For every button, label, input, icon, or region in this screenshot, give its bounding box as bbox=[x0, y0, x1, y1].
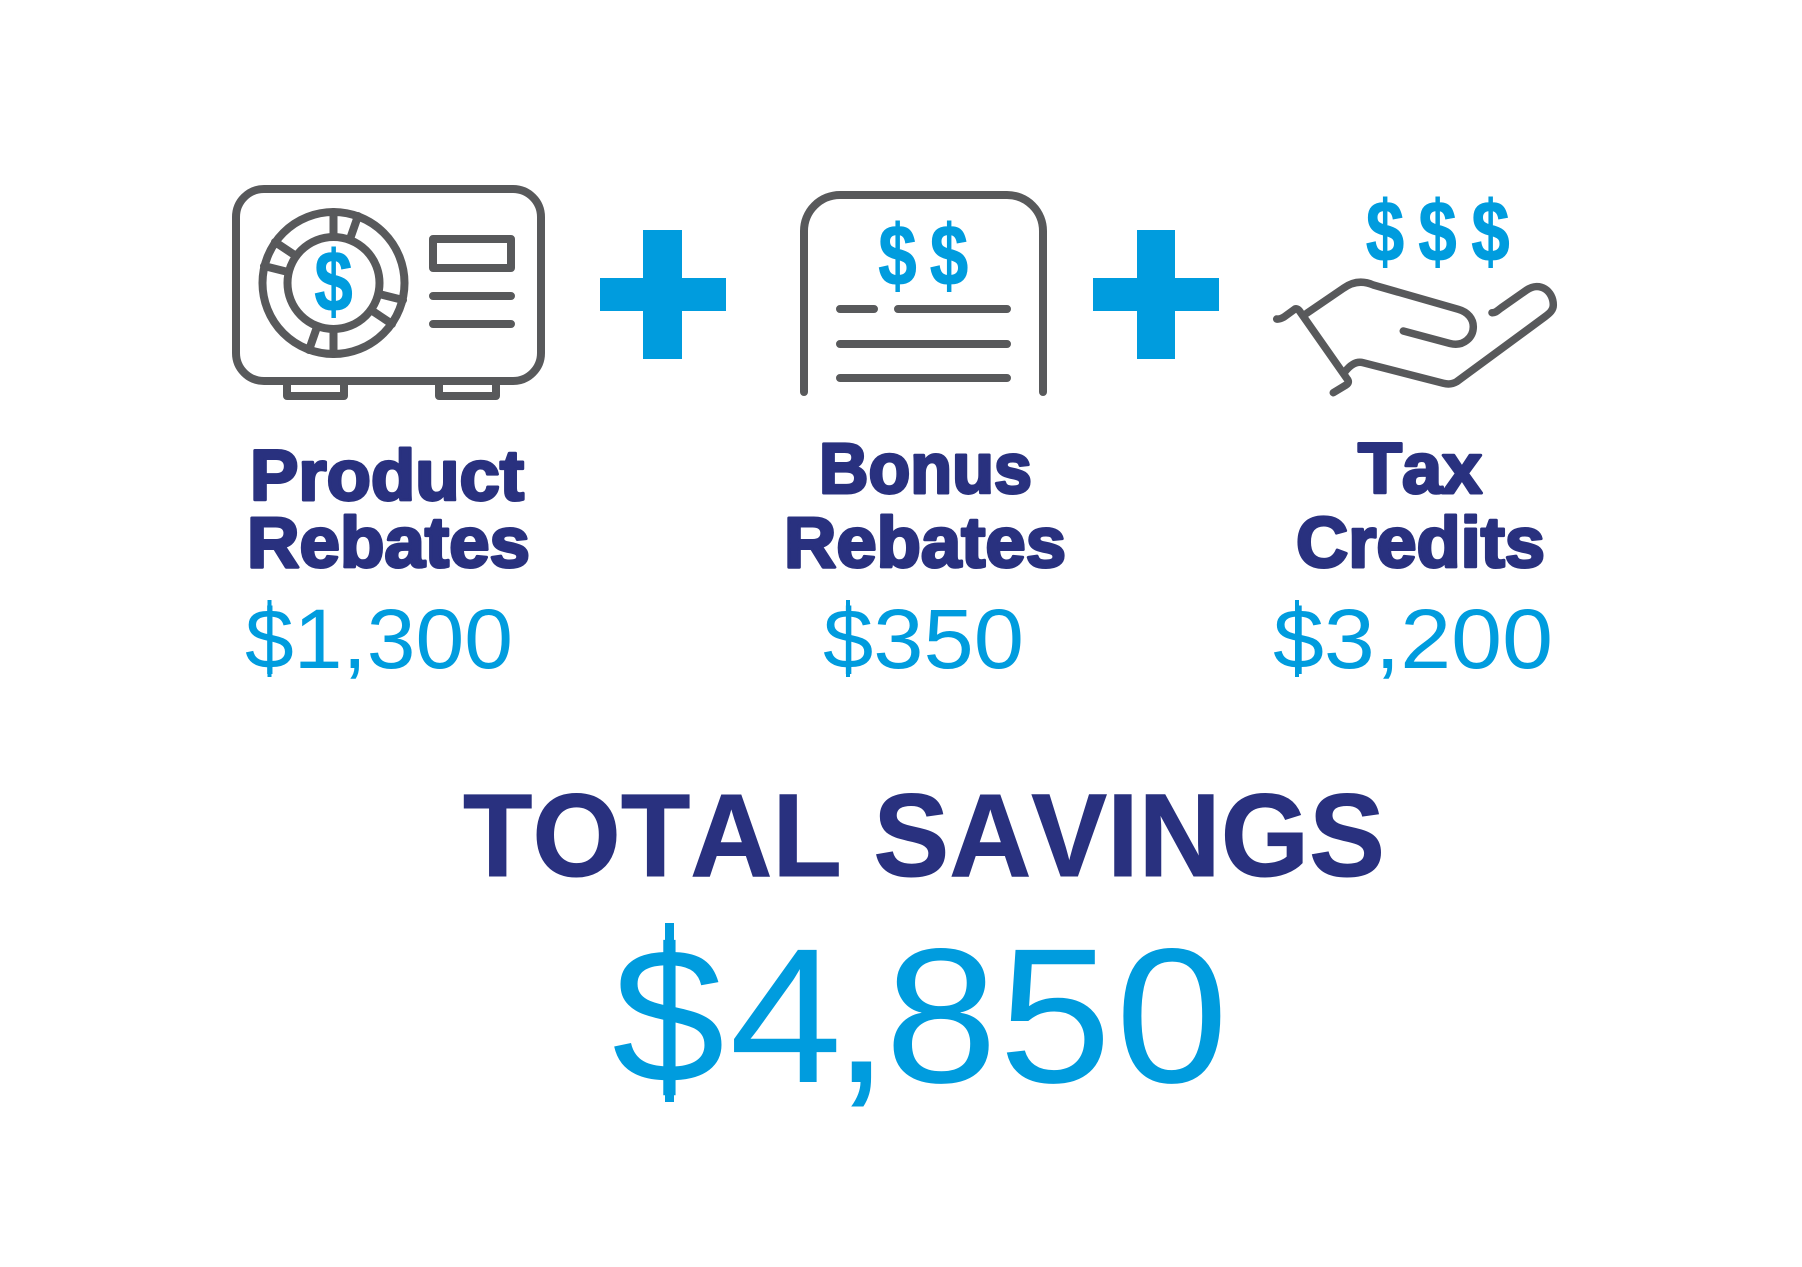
amount: total $4,850: $4,850 bbox=[612, 908, 1228, 1123]
icon: plus sign 2 bbox=[1093, 230, 1219, 359]
panel: product rebates bbox=[236, 189, 541, 686]
icon: document with dollar signs: $ bbox=[930, 208, 968, 304]
amount: $350: $350 bbox=[823, 592, 1024, 686]
heading: bonus rebates: Rebates bbox=[784, 504, 1066, 583]
icon: heat pump unit with dollar sign bbox=[236, 189, 541, 396]
heading: tax credits: Tax bbox=[1358, 430, 1482, 509]
heading: bonus rebates bbox=[784, 430, 1066, 583]
heading: product rebates: Rebates bbox=[247, 504, 530, 583]
amount: $1,300: $1,300 bbox=[245, 592, 513, 686]
icon: open hand with dollar signs: $ bbox=[1418, 184, 1457, 280]
icon: heat pump unit with dollar sign: $ bbox=[314, 234, 353, 330]
icon: document with dollar signs bbox=[804, 195, 1043, 392]
icon: open hand with dollar signs: $ bbox=[1366, 184, 1404, 280]
icon: open hand with dollar signs bbox=[1277, 184, 1553, 393]
heading: tax credits: Credits bbox=[1296, 504, 1545, 583]
panel: tax credits bbox=[1273, 184, 1553, 686]
amount: $3,200: $3,200 bbox=[1273, 592, 1553, 686]
heading: product rebates bbox=[247, 437, 530, 583]
panel: bonus rebates bbox=[784, 195, 1066, 686]
icon: document with dollar signs: $ bbox=[878, 208, 917, 304]
heading: bonus rebates: Bonus bbox=[819, 430, 1032, 509]
heading: tax credits bbox=[1296, 430, 1545, 583]
icon: open hand with dollar signs: $ bbox=[1471, 184, 1510, 280]
heading: total savings: TOTAL SAVINGS bbox=[463, 770, 1385, 902]
icon: plus sign 1 bbox=[600, 230, 726, 359]
heading: product rebates: Product bbox=[250, 437, 524, 516]
